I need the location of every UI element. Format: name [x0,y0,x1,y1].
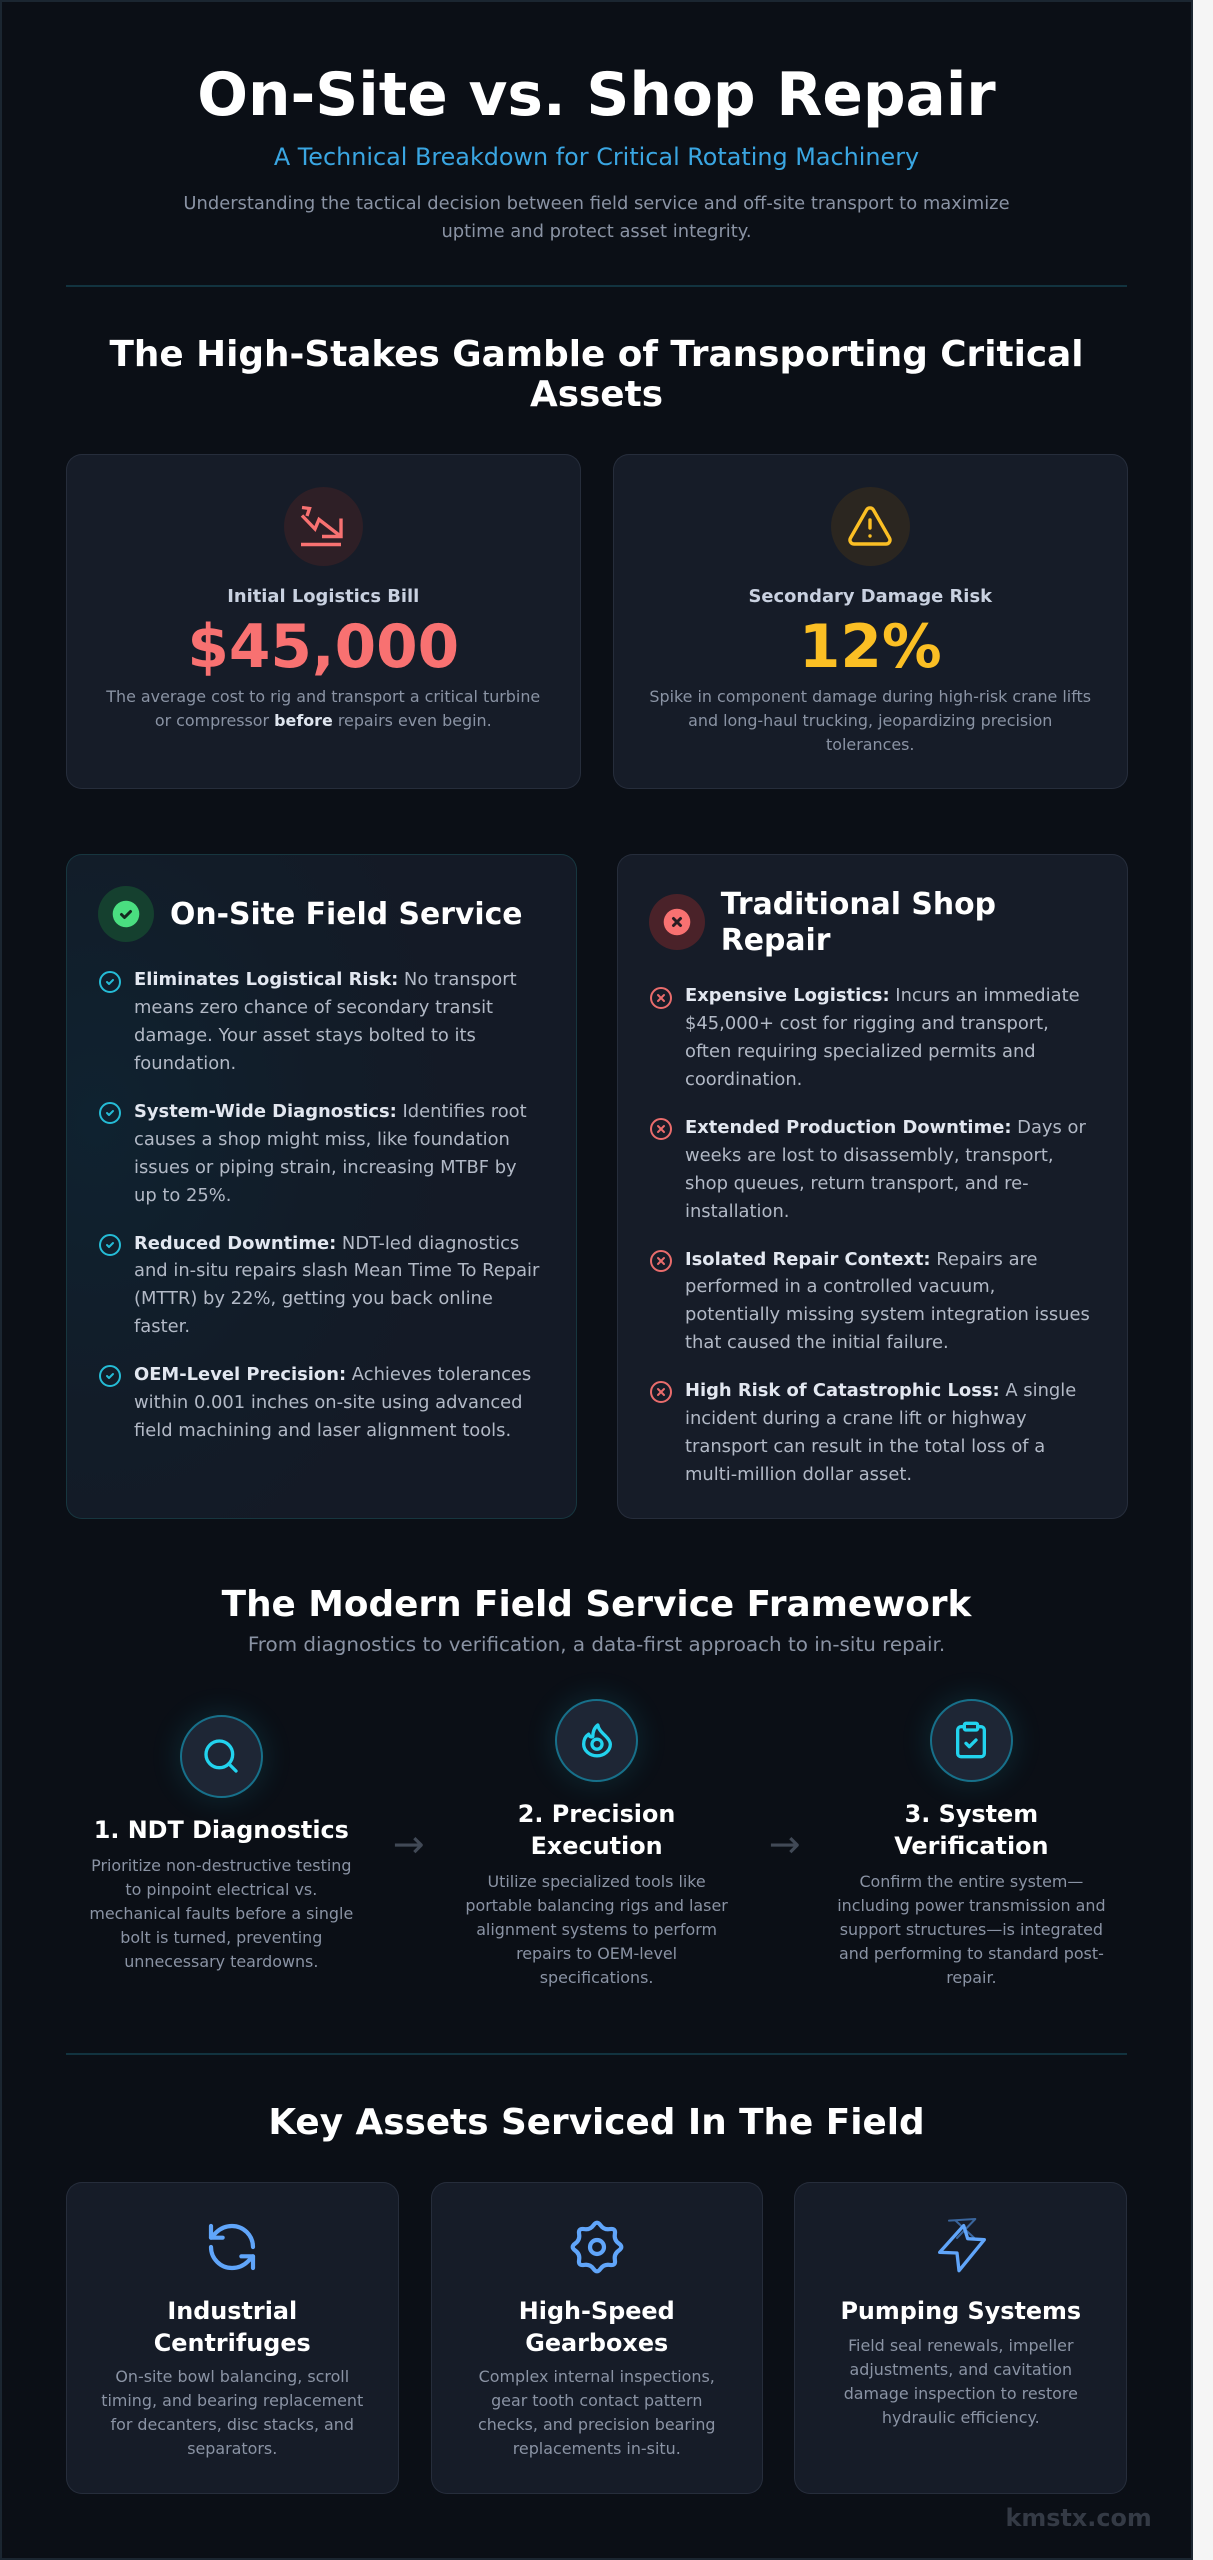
item text: performed in a controlled vacuum, [685,1276,995,1297]
panel: secondary damage risk [613,454,1128,789]
panel: high-speed gearboxes [430,2182,763,2494]
card title: Pumping Systems [840,2296,1081,2324]
panel: industrial centrifuges [66,2182,398,2494]
item text: coordination. [685,1069,802,1090]
heading: high-stakes gamble [109,334,1084,414]
panel heading: Repair [721,923,830,958]
item text [685,1117,1086,1222]
panel heading: Traditional Shop [721,887,996,922]
item text: weeks are lost to disassembly, transport, [685,1145,1054,1166]
icon: check [99,1365,121,1387]
stat description: The average cost to rig and transport a critical turbine [106,687,540,706]
card title: High-Speed [519,2296,675,2324]
card title [154,2296,311,2356]
card text [101,2367,363,2458]
list item: isolated context [650,1249,1090,1353]
item text: within 0.001 inches on-site using advanced [134,1392,523,1413]
step text [465,1872,728,1987]
step title: 3. System [905,1800,1038,1828]
step title: Execution [531,1832,663,1860]
icon: cross [650,1250,672,1272]
item text: causes a shop might miss, like foundation [134,1129,510,1150]
item text [134,1364,531,1441]
title: On-Site vs. Shop Repair [197,61,996,130]
item text: up to 25%. [134,1185,231,1206]
icon: red cross badge [649,894,705,950]
step text: and performing to standard post- [839,1944,1104,1963]
item text: $45,000+ cost for rigging and transport, [685,1013,1049,1034]
item text: often requiring specialized permits and [685,1041,1036,1062]
icon: cross [650,1381,672,1403]
intro text: Understanding the tactical decision between field service and off-site transport to maximize [183,192,1010,214]
item text: Expensive Logistics: Incurs an immediate [685,985,1080,1006]
step text [837,1872,1106,1987]
stat label: Secondary Damage Risk [748,586,992,607]
list item: precision [99,1364,531,1441]
item text: faster. [134,1316,190,1337]
heading: high-stakes gamble: The High-Stakes Gamble of Transporting Critical [109,334,1084,374]
item text [685,1249,1090,1353]
icon: green check badge [98,886,154,942]
list item: catastrophic loss [650,1380,1076,1485]
item text: Eliminates Logistical Risk: No transport [134,969,517,990]
card text: adjustments, and cavitation [849,2360,1072,2379]
panel heading [720,887,996,958]
list item: downtime [650,1117,1086,1222]
step text: bolt is turned, preventing [120,1928,322,1947]
item text: Extended Production Downtime: Days or [685,1117,1086,1138]
item text: installation. [685,1201,789,1222]
intro text: uptime and protect asset integrity. [441,220,752,242]
stat description [106,687,540,730]
card text: On-site bowl balancing, scroll [115,2367,349,2386]
heading: key assets: Key Assets Serviced In The Field [268,2102,925,2142]
step text: Confirm the entire system— [859,1872,1083,1891]
icon: cross [650,1118,672,1140]
panel: pumping systems [794,2182,1127,2494]
stat value: 12% [799,613,942,682]
card text [430,2365,763,2461]
stat description: tolerances. [826,735,914,754]
arrow: → [769,1822,801,1866]
step text: Prioritize non-destructive testing [91,1856,351,1875]
heading: high-stakes gamble: Assets [530,374,663,414]
card text: replacements in-situ. [513,2439,681,2458]
stat label: Initial Logistics Bill [227,586,419,607]
item text: that caused the initial failure. [685,1332,949,1353]
icon: check [99,1102,121,1124]
card text: separators. [187,2439,277,2458]
card title: Gearboxes [525,2328,668,2356]
stat description: and long-haul trucking, jeopardizing precision [688,711,1052,730]
stat description: Spike in component damage during high-risk crane lifts [649,687,1091,706]
item text: OEM-Level Precision: Achieves tolerances [134,1364,531,1385]
intro text [183,192,1010,242]
icon: check [99,971,121,993]
panel: on-site field service [66,854,577,1518]
step text: to pinpoint electrical vs. [125,1880,317,1899]
card text: checks, and precision bearing [478,2415,716,2434]
icon: search [180,1714,263,1798]
stat description: or compressor before repairs even begin. [155,711,492,730]
item text [134,1233,540,1337]
card text: hydraulic efficiency. [882,2408,1040,2427]
step text: Utilize specialized tools like [487,1872,706,1891]
icon: cross [650,987,672,1009]
arrow: → [393,1822,425,1866]
watermark: kmstx.com [1006,2504,1152,2532]
item text [685,985,1080,1090]
framework subheading: From diagnostics to verification, a data-first approach to in-situ repair. [248,1633,945,1656]
card title: Industrial [167,2296,297,2324]
icon: trending down [284,487,363,566]
card text: damage inspection to restore [844,2384,1078,2403]
stat value: $45,000 [187,613,459,682]
stat description [649,687,1091,754]
card text: for decanters, disc stacks, and [110,2415,354,2434]
step 2: precision execution [465,1693,728,1987]
step text: portable balancing rigs and laser [465,1896,728,1915]
list item: downtime [99,1233,540,1337]
card text: timing, and bearing replacement [101,2391,363,2410]
item text: field machining and laser alignment tools. [134,1420,511,1441]
step text: specifications. [540,1968,653,1987]
item text: Isolated Repair Context: Repairs are [685,1249,1038,1270]
card text [794,2334,1127,2430]
item text: shop queues, return transport, and re- [685,1173,1029,1194]
item text: Reduced Downtime: NDT-led diagnostics [134,1233,519,1254]
icon: check [99,1234,121,1256]
step text [89,1856,353,1971]
step title: 2. Precision [518,1800,675,1828]
icon: gear [569,2219,625,2275]
item text: potentially missing system integration issues [685,1304,1090,1325]
card text: Field seal renewals, impeller [848,2336,1074,2355]
step title: 1. NDT Diagnostics [94,1816,349,1844]
panel heading: On-Site Field Service [170,897,523,932]
card text: Complex internal inspections, [479,2367,715,2386]
item text: incident during a crane lift or highway [685,1408,1027,1429]
card title [430,2294,763,2358]
step text: including power transmission and [837,1896,1106,1915]
item text [685,1380,1076,1485]
step title: Verification [894,1832,1049,1860]
step text: repair. [946,1968,997,1987]
list item: diagnostics [99,1101,527,1206]
item text: transport can result in the total loss of a [685,1436,1045,1457]
icon: clipboard check [930,1698,1013,1782]
item text: means zero chance of secondary transit [134,997,493,1018]
item text: (MTTR) by 22%, getting you back online [134,1288,493,1309]
icon: flame target [555,1698,638,1782]
step text: repairs to OEM-level [516,1944,677,1963]
panel: initial logistics bill [66,454,580,789]
item text [134,969,517,1074]
item text: System-Wide Diagnostics: Identifies root [134,1101,527,1122]
subtitle: A Technical Breakdown for Critical Rotating Machinery [274,143,919,171]
step 3: system verification [837,1693,1106,1987]
step text: alignment systems to perform [476,1920,717,1939]
item text: multi-million dollar asset. [685,1464,912,1485]
heading: framework: The Modern Field Service Framework [222,1584,971,1624]
step text: unnecessary teardowns. [124,1952,318,1971]
item text: issues or piping strain, increasing MTBF by [134,1157,517,1178]
step 1: NDT diagnostics [89,1709,353,1971]
icon: warning triangle [831,487,910,566]
card title: Centrifuges [154,2328,311,2356]
step title [894,1800,1049,1860]
item text: and in-situ repairs slash Mean Time To Repair [134,1260,539,1281]
item text: High Risk of Catastrophic Loss: A single [685,1380,1076,1401]
panel: traditional shop repair [617,854,1128,1518]
item text: foundation. [134,1053,236,1074]
item text: damage. Your asset stays bolted to its [134,1025,476,1046]
step text: mechanical faults before a single [89,1904,353,1923]
item text [134,1101,527,1206]
list item: logistics [650,985,1080,1090]
step text: support structures—is integrated [840,1920,1103,1939]
card text: gear tooth contact pattern [491,2391,702,2410]
icon: refresh [208,2224,256,2270]
icon: bolt [927,2213,993,2280]
list item: logistical risk [99,969,517,1074]
step title [518,1800,675,1860]
